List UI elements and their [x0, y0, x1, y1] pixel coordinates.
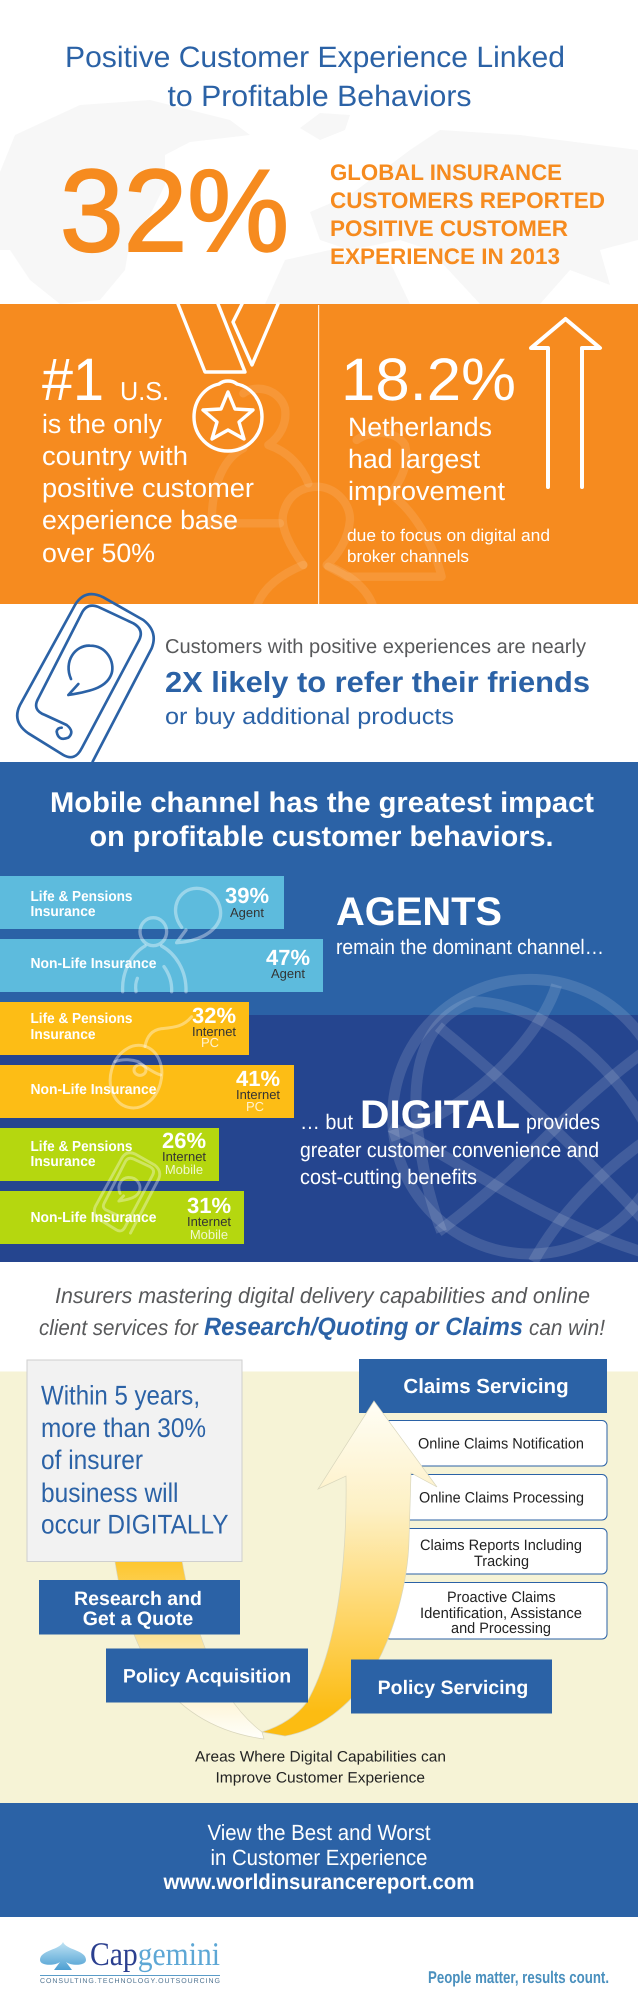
bar labels: Life & Pensions	[30, 1011, 132, 1027]
claims detail labels: Online Claims Processing	[419, 1490, 584, 1506]
icon: agent person	[123, 888, 221, 992]
stat description: global insurance customers: EXPERIENCE IN 2013	[330, 244, 560, 269]
claims detail labels: Tracking	[474, 1553, 529, 1570]
bar channel names: Internet	[192, 1024, 236, 1039]
panel: referral text: 2X likely to refer their friends	[165, 667, 590, 699]
bars: agent	[0, 876, 323, 992]
stat description: global insurance customers: GLOBAL INSURANCE	[330, 160, 562, 185]
box: policy acquisition	[106, 1648, 308, 1702]
world map background	[0, 100, 638, 304]
text: digital: DIGITAL	[360, 1093, 520, 1137]
logo: Capgemini	[40, 1937, 220, 1985]
panel: digital capabilities	[0, 1359, 638, 1803]
icon: medal	[178, 304, 278, 451]
claims detail labels: Claims Reports Including	[420, 1537, 582, 1554]
bar labels: Non-Life Insurance	[30, 956, 156, 972]
bar chart	[0, 876, 323, 1244]
text: digital: greater customer convenience and	[300, 1139, 599, 1162]
bar labels	[30, 889, 156, 1226]
divider	[318, 305, 319, 604]
callout: within 5 years: more than 30%	[41, 1413, 206, 1443]
text: 18.2% Netherlands: 18.2%	[341, 346, 516, 413]
text: #1 U.S.	[42, 346, 254, 568]
claims detail labels	[418, 1436, 584, 1637]
box: research and get a quote: Get a Quote	[83, 1608, 193, 1630]
bar channel sub-names	[165, 1035, 264, 1242]
bar labels: Life & Pensions	[30, 889, 132, 905]
text: #1 U.S.: experience base	[42, 505, 238, 535]
claims detail labels: Online Claims Notification	[418, 1436, 584, 1452]
heading: mobile channel: on profitable customer behaviors.	[90, 821, 554, 853]
caption: areas where digital capabilities	[195, 1748, 446, 1786]
bars: internet mobile	[0, 1128, 244, 1244]
panel: referral text	[165, 636, 590, 729]
icon: mouse	[103, 1017, 192, 1114]
stat description: global insurance customers: CUSTOMERS REPORTED	[330, 188, 605, 213]
text: agents: AGENTS	[336, 890, 502, 934]
bar channel names: Agent	[271, 966, 305, 981]
text: 18.2% Netherlands	[341, 346, 550, 566]
icon: globe	[390, 979, 638, 1262]
panel: referral text: or buy additional products	[165, 703, 454, 729]
bar channel names	[162, 905, 305, 1229]
claims detail labels: and Processing	[451, 1620, 551, 1637]
bar channel names: Internet	[236, 1087, 280, 1102]
text: agents	[336, 890, 604, 959]
bar percentages: 31%	[187, 1193, 231, 1218]
icon: small phone	[94, 1153, 160, 1233]
icon: swoosh arrow tail	[114, 1555, 264, 1739]
bars: internet PC	[0, 1002, 294, 1118]
text: #1 U.S.: country with	[42, 441, 188, 471]
bar channel names: Agent	[230, 905, 264, 920]
icon: swoosh arrow	[262, 1401, 437, 1736]
stat description: global insurance customers	[330, 160, 605, 269]
title: to Profitable Behaviors	[168, 80, 472, 113]
callout: within 5 years	[27, 1360, 242, 1562]
icon: phone with speech bubble	[17, 594, 154, 762]
text: 18.2% Netherlands: broker channels	[347, 547, 469, 566]
panel: blue channel section	[0, 762, 638, 1262]
logo: Capgemini: Capgemini	[90, 1937, 220, 1973]
panel: footer call to action	[0, 1803, 638, 1917]
text: digital	[300, 1093, 600, 1189]
callout: insurers mastering digital: client services for	[39, 1315, 200, 1340]
text: digital: … but	[300, 1111, 353, 1134]
bar channel sub-names: Mobile	[165, 1162, 203, 1177]
icon: spade	[40, 1942, 86, 1970]
text: agents: remain the dominant channel…	[336, 936, 604, 959]
box: research and get a quote	[39, 1580, 240, 1634]
text: 18.2% Netherlands: Netherlands	[348, 412, 492, 442]
panel: referral text: Customers with positive experiences are nearly	[165, 636, 586, 658]
bar labels: Insurance	[30, 1027, 96, 1043]
caption: areas where digital capabilities: Areas Where Digital Capabilities can	[195, 1748, 446, 1766]
callout: insurers mastering digital: Insurers mastering digital delivery capabilities and online	[55, 1283, 590, 1308]
text: #1 U.S.: is the only	[42, 409, 163, 439]
text: 18.2% Netherlands: due to focus on digital and	[347, 526, 550, 545]
stat: 32%: 32%	[60, 145, 289, 276]
callout: insurers mastering digital	[39, 1283, 605, 1341]
bar channel sub-names: PC	[201, 1035, 219, 1050]
claims detail boxes	[385, 1420, 607, 1639]
logo: Capgemini: CONSULTING.TECHNOLOGY.OUTSOURCING	[40, 1978, 220, 1985]
panel: footer call to action: www.worldinsurancereport.com	[163, 1870, 474, 1894]
heading: mobile channel	[50, 787, 595, 853]
bar channel names: Internet	[187, 1214, 231, 1229]
title: Positive Customer Experience Linked	[65, 41, 565, 74]
box: claims servicing	[359, 1359, 607, 1413]
bar percentages	[162, 883, 310, 1218]
icon: up arrow	[531, 319, 600, 487]
panel: orange band	[0, 304, 638, 607]
bar labels: Non-Life Insurance	[30, 1082, 156, 1098]
claims detail labels: Identification, Assistance	[420, 1605, 582, 1622]
text: #1 U.S.: #1	[42, 346, 104, 413]
callout: within 5 years: Within 5 years,	[41, 1380, 200, 1410]
box: policy acquisition: Policy Acquisition	[123, 1666, 291, 1688]
heading: mobile channel: Mobile channel has the greatest impact	[50, 787, 595, 819]
text: digital: provides	[526, 1111, 600, 1134]
bar percentages: 26%	[162, 1128, 206, 1153]
bar labels: Non-Life Insurance	[30, 1210, 156, 1226]
claims detail labels: Proactive Claims	[447, 1589, 556, 1606]
bar percentages: 39%	[225, 883, 269, 908]
callout: insurers mastering digital: Research/Quoting or Claims	[204, 1313, 523, 1341]
text: #1 U.S.: over 50%	[42, 538, 155, 568]
caption: areas where digital capabilities: Improve Customer Experience	[216, 1770, 425, 1786]
text: #1 U.S.: positive customer	[42, 473, 254, 503]
callout: within 5 years: of insurer	[41, 1445, 143, 1475]
bar labels: Insurance	[30, 904, 96, 920]
box: policy servicing	[351, 1660, 552, 1714]
text: #1 U.S.: U.S.	[120, 376, 169, 406]
bar labels: Life & Pensions	[30, 1139, 132, 1155]
text: 18.2% Netherlands: had largest	[348, 444, 481, 474]
bar channel names: Internet	[162, 1149, 206, 1164]
bar percentages: 41%	[236, 1066, 280, 1091]
bar labels: Insurance	[30, 1154, 96, 1170]
callout: within 5 years: business will	[41, 1478, 178, 1508]
callout: insurers mastering digital: can win!	[529, 1315, 605, 1340]
bar channel sub-names: PC	[246, 1099, 264, 1114]
panel: footer call to action: View the Best and Worst	[208, 1820, 430, 1845]
box: policy servicing: Policy Servicing	[378, 1677, 528, 1699]
panel: footer call to action: in Customer Experience	[210, 1845, 428, 1870]
text: digital: cost-cutting benefits	[300, 1166, 477, 1189]
box: research and get a quote: Research and	[74, 1588, 202, 1610]
bar percentages: 32%	[192, 1003, 236, 1028]
box: claims servicing: Claims Servicing	[403, 1375, 569, 1398]
title	[65, 41, 565, 113]
callout: within 5 years: occur DIGITALLY	[41, 1510, 228, 1540]
stat description: global insurance customers: POSITIVE CUSTOMER	[330, 216, 568, 241]
icon: people silhouettes	[212, 389, 442, 607]
bar channel sub-names: Mobile	[190, 1227, 228, 1242]
bar percentages: 47%	[266, 945, 310, 970]
text: 18.2% Netherlands: improvement	[348, 476, 506, 506]
